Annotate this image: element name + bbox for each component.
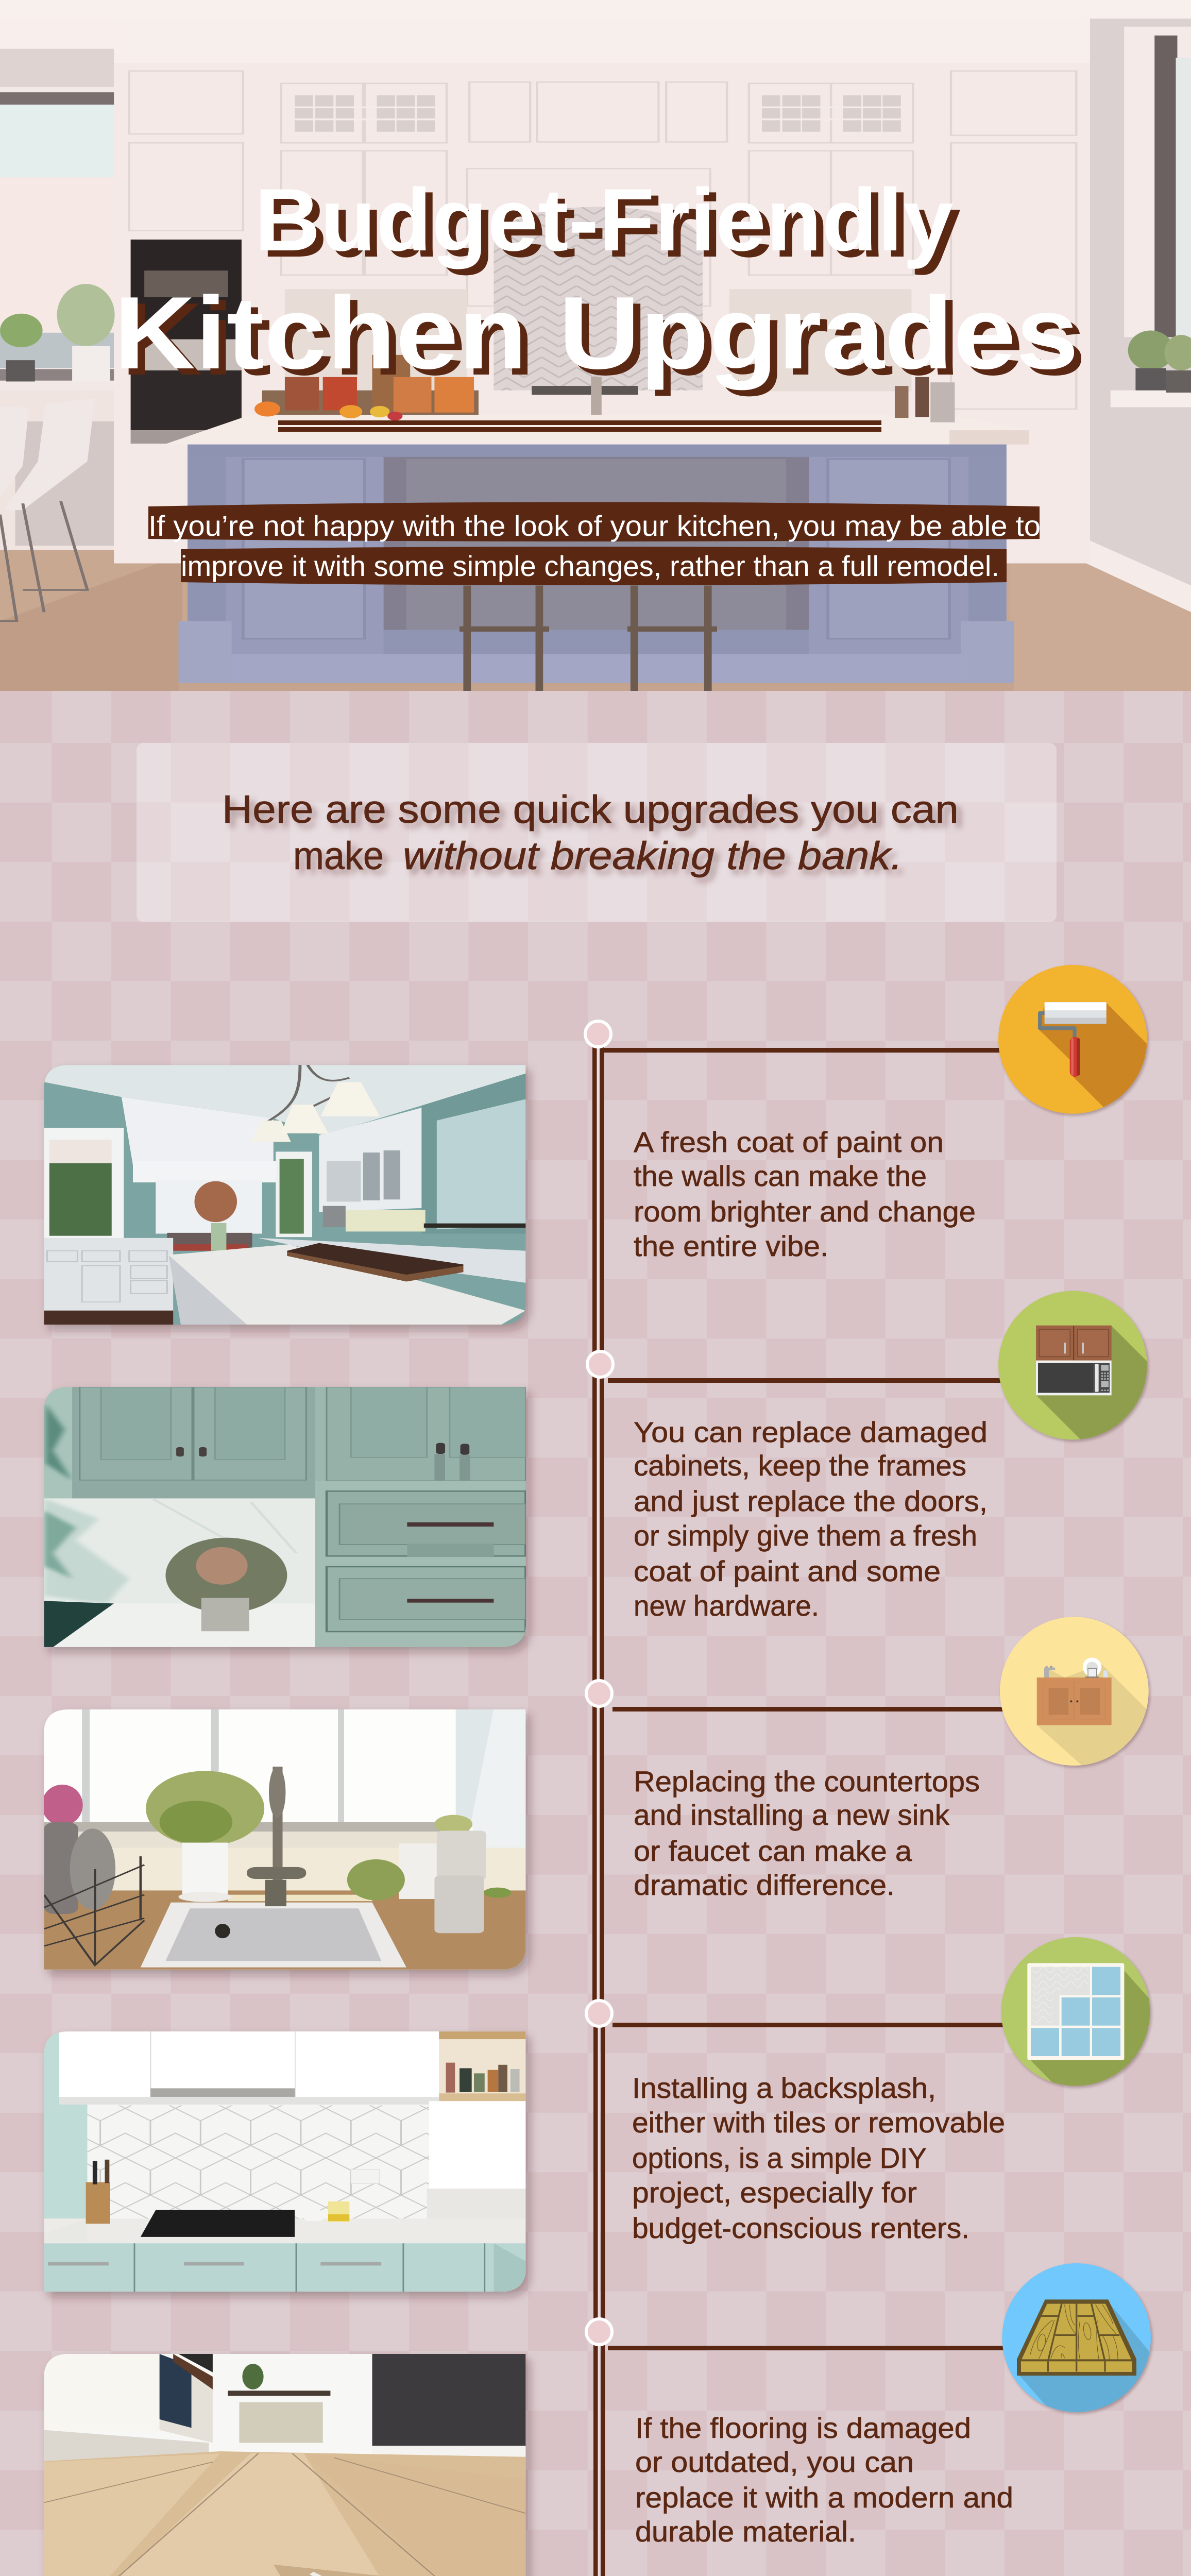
- step 2 text: You can replace damaged: [634, 1416, 988, 1448]
- intro line 1: Here are some quick upgrades you can: [222, 788, 959, 832]
- step 3 photo: window sink and plants: [42, 1709, 525, 1970]
- step 2 text: coat of paint and some: [634, 1555, 941, 1587]
- step 5 text: durable material.: [635, 2515, 856, 2548]
- step 2 text: or simply give them a fresh: [634, 1519, 977, 1552]
- step 4 text: [632, 2072, 1005, 2244]
- icon shadow: [1036, 1326, 1158, 1454]
- step 4 text: budget-conscious renters.: [632, 2212, 969, 2244]
- icon shadow: [1037, 1664, 1158, 1779]
- hero banner: [0, 0, 1191, 696]
- step 2 photo: sage cabinets and marble: [44, 1387, 525, 1647]
- intro panel: [137, 743, 1057, 922]
- step 5 text: replace it with a modern and: [635, 2481, 1013, 2514]
- step 5 icon: wood planks: [1002, 2263, 1158, 2423]
- step 2 text: cabinets, keep the frames: [634, 1449, 966, 1482]
- step 4 photo: hex tile backsplash: [44, 2031, 525, 2292]
- hero heading: Budget-Friendly: [254, 171, 954, 269]
- hero heading: Kitchen Upgrades: [121, 282, 1086, 397]
- step 4 text: either with tiles or removable: [632, 2106, 1005, 2139]
- step 1 text: the entire vibe.: [634, 1230, 828, 1262]
- step 5 text: or outdated, you can: [635, 2446, 914, 2478]
- step 1 text: room brighter and change: [634, 1195, 976, 1228]
- step 4 text: options, is a simple DIY: [632, 2142, 927, 2174]
- step 3 text: Replacing the countertops: [634, 1765, 980, 1798]
- title double underline: [278, 420, 881, 432]
- step 3 text: dramatic difference.: [634, 1869, 895, 1901]
- checkered background: [0, 685, 1191, 2576]
- step 2 icon: cabinets and microwave: [998, 1291, 1150, 1443]
- hero subtitle band: If you’re not happy with the look of your kitchen, you may be able to: [148, 510, 1041, 542]
- step 1 text: the walls can make the: [634, 1160, 927, 1192]
- timeline spine: [592, 1046, 605, 2576]
- step 2 text: [634, 1416, 988, 1622]
- icon shadow: [1030, 1971, 1158, 2098]
- step 4 icon: backsplash tiles: [1001, 1937, 1158, 2098]
- timeline nodes: [585, 1021, 613, 2576]
- hero subtitle band: [148, 502, 1041, 585]
- step 5 text: If the flooring is damaged: [635, 2412, 971, 2444]
- step 4 text: project, especially for: [632, 2176, 917, 2209]
- step 1 icon: paint roller: [998, 965, 1158, 1125]
- step 2 text: new hardware.: [634, 1589, 819, 1622]
- step 1 text: [634, 1126, 976, 1262]
- step 3 text: [634, 1765, 980, 1901]
- step 5 photo: low angle wood floor: [44, 2354, 525, 2576]
- hero subtitle band: improve it with some simple changes, rather than a full remodel.: [181, 550, 999, 582]
- step 1 photo: white kitchen with teal walls: [44, 1065, 525, 1325]
- step 3 icon: sink cabinet: [1000, 1617, 1158, 1779]
- intro line 2: without breaking the bank.: [403, 834, 903, 878]
- step 3 text: and installing a new sink: [634, 1799, 950, 1831]
- step 2 text: and just replace the doors,: [634, 1485, 988, 1517]
- hero heading: Budget-Friendly: [262, 177, 961, 276]
- icon shadow: [1038, 1003, 1147, 1107]
- connector lines: [604, 1048, 1007, 2576]
- step 4 text: Installing a backsplash,: [632, 2072, 936, 2104]
- hero heading: [114, 171, 1086, 397]
- step 5 text: [635, 2412, 1013, 2548]
- icon shadow: [1019, 2301, 1158, 2423]
- hero photo: kitchen: [0, 0, 1191, 696]
- step 3 text: or faucet can make a: [634, 1835, 912, 1867]
- step 1 text: A fresh coat of paint on: [634, 1126, 944, 1158]
- hero heading: Kitchen Upgrades: [114, 276, 1079, 391]
- intro line 2: make: [293, 834, 384, 878]
